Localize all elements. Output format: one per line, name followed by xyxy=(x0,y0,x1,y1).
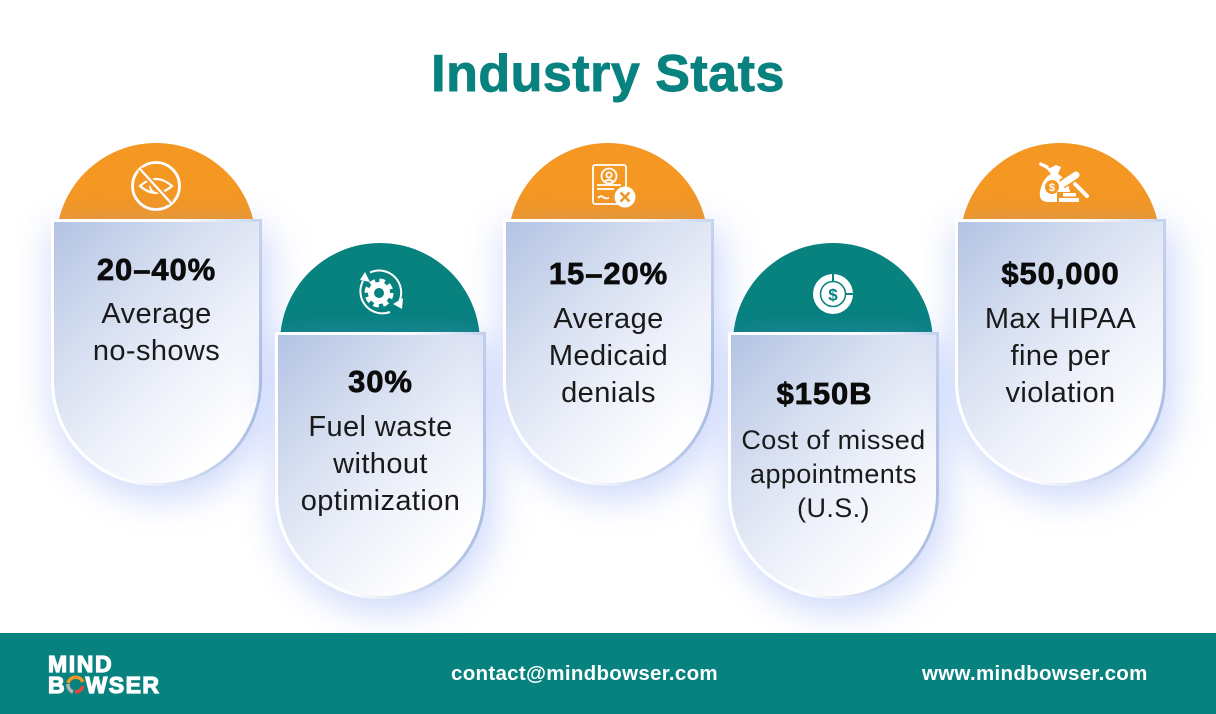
stat label: Max HIPAA xyxy=(985,303,1136,335)
stat label xyxy=(741,425,926,523)
logo: BOWSER xyxy=(48,672,161,698)
stat label: optimization xyxy=(301,485,460,517)
stat label: without xyxy=(333,448,428,480)
title: Industry Stats xyxy=(431,45,785,103)
stat value: 30% xyxy=(348,364,413,399)
card body xyxy=(955,219,1166,486)
stat label xyxy=(301,411,460,517)
panel: medicaid denials xyxy=(486,143,738,514)
card body xyxy=(275,332,486,599)
orange dome with no-show icon xyxy=(59,143,253,219)
stat value: $50,000 xyxy=(1001,256,1120,291)
stat label: Medicaid xyxy=(549,340,668,372)
panel: fuel waste xyxy=(258,243,510,627)
stat value: $150B xyxy=(777,376,872,411)
teal dome with dollar chart icon: $ xyxy=(828,286,838,304)
stat label: no-shows xyxy=(93,335,220,367)
card body xyxy=(51,219,262,486)
stat value: 20–40% xyxy=(97,252,216,287)
logo: MIND xyxy=(48,651,113,677)
panel: HIPAA fine xyxy=(938,143,1190,514)
stat label: Average xyxy=(101,298,212,330)
card body xyxy=(728,332,939,599)
stat label: fine per xyxy=(1011,340,1110,372)
contact email: contact@mindbowser.com xyxy=(451,662,718,685)
stat label: denials xyxy=(561,377,656,409)
panel: average no-shows xyxy=(34,143,286,514)
footer bar xyxy=(0,633,1216,714)
stat label: appointments xyxy=(750,459,917,489)
stat label: Average xyxy=(553,303,664,335)
stat label xyxy=(549,303,668,409)
teal dome with dollar chart icon xyxy=(734,243,932,332)
stat label: (U.S.) xyxy=(797,493,870,523)
logo xyxy=(48,651,161,698)
teal dome with gear icon xyxy=(280,243,480,332)
card body xyxy=(503,219,714,486)
stat label: violation xyxy=(1006,377,1116,409)
website: www.mindbowser.com xyxy=(922,662,1148,685)
stat value: 15–20% xyxy=(549,256,668,291)
stat label xyxy=(93,298,220,367)
orange dome with money bag and gavel icon xyxy=(963,143,1157,219)
stat label: Cost of missed xyxy=(741,425,926,455)
logo swirl icon xyxy=(66,676,85,694)
orange dome with money bag and gavel icon: $ xyxy=(1049,182,1055,194)
stat label: Fuel waste xyxy=(308,411,453,443)
stat label xyxy=(985,303,1136,409)
panel: cost of missed appointments xyxy=(712,243,964,627)
orange dome with denied document icon xyxy=(511,143,705,219)
